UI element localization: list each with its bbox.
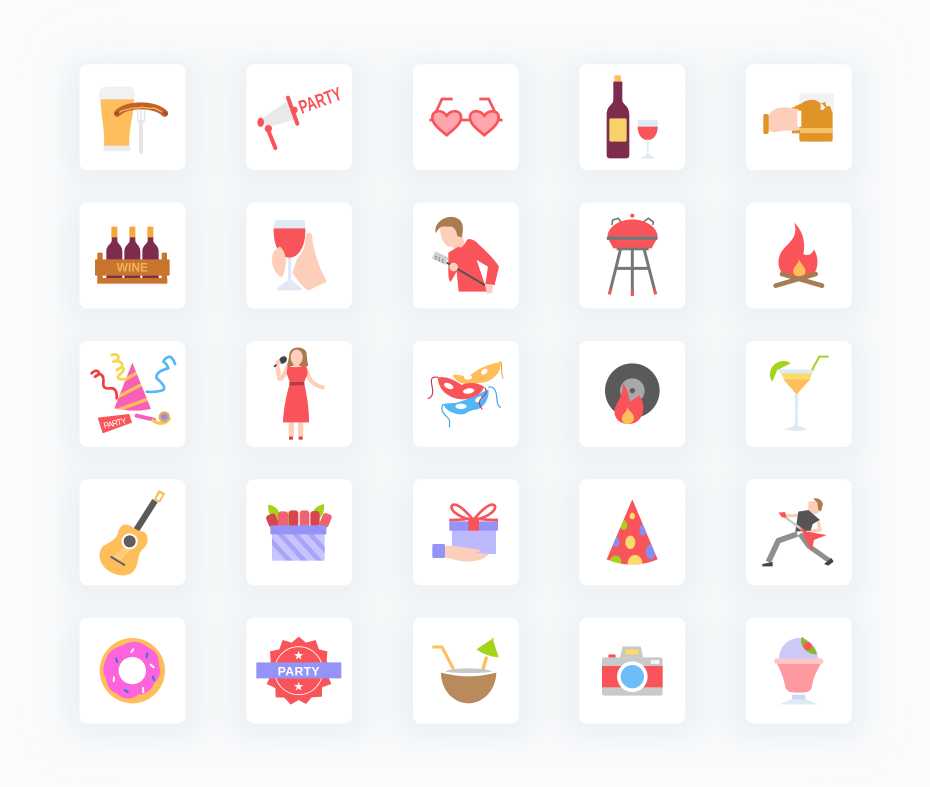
icon: vinyl record on fire [605, 363, 660, 424]
icon: polka-dot party hat [607, 499, 658, 572]
icon: party badge: PARTY [278, 664, 320, 678]
icon: beer and sausage on fork [99, 87, 167, 152]
icon: party hat, streamers, blower: PARTY [102, 415, 128, 431]
icon: ice cream sundae [774, 637, 823, 704]
icon: campfire [776, 223, 822, 286]
icon: wine bottle and glass [607, 75, 658, 159]
icon: party hat, streamers, blower [92, 354, 175, 433]
icon: party badge: ★ [293, 648, 304, 662]
icon: camera [602, 646, 663, 696]
icon: wine crate: WINE [117, 261, 148, 275]
icon: carnival masks [428, 362, 503, 427]
icon: wine crate [95, 227, 170, 284]
icon: rock guitarist [762, 498, 834, 566]
icon: woman singing in red dress [274, 347, 323, 440]
icon: hand holding wine glass [272, 220, 327, 291]
icon: party badge [256, 637, 341, 705]
icon: cocktail martini [770, 357, 829, 431]
icon: megaphone with PARTY text: PARTY [296, 84, 345, 119]
icon: hand holding gift box [432, 505, 498, 561]
icon: coconut drink [432, 638, 499, 703]
icon: heart sunglasses [429, 99, 503, 135]
icon: acoustic guitar [100, 490, 165, 575]
icon: barbecue grill [607, 214, 658, 296]
icon: hand holding beer mug [763, 93, 834, 142]
icon: man singing with microphone stand [432, 217, 499, 293]
icon: megaphone with PARTY text [257, 84, 345, 148]
icon: flower box with roses [266, 504, 332, 561]
icon: pink donut [100, 638, 165, 703]
icon: party badge: ★ [293, 680, 304, 694]
